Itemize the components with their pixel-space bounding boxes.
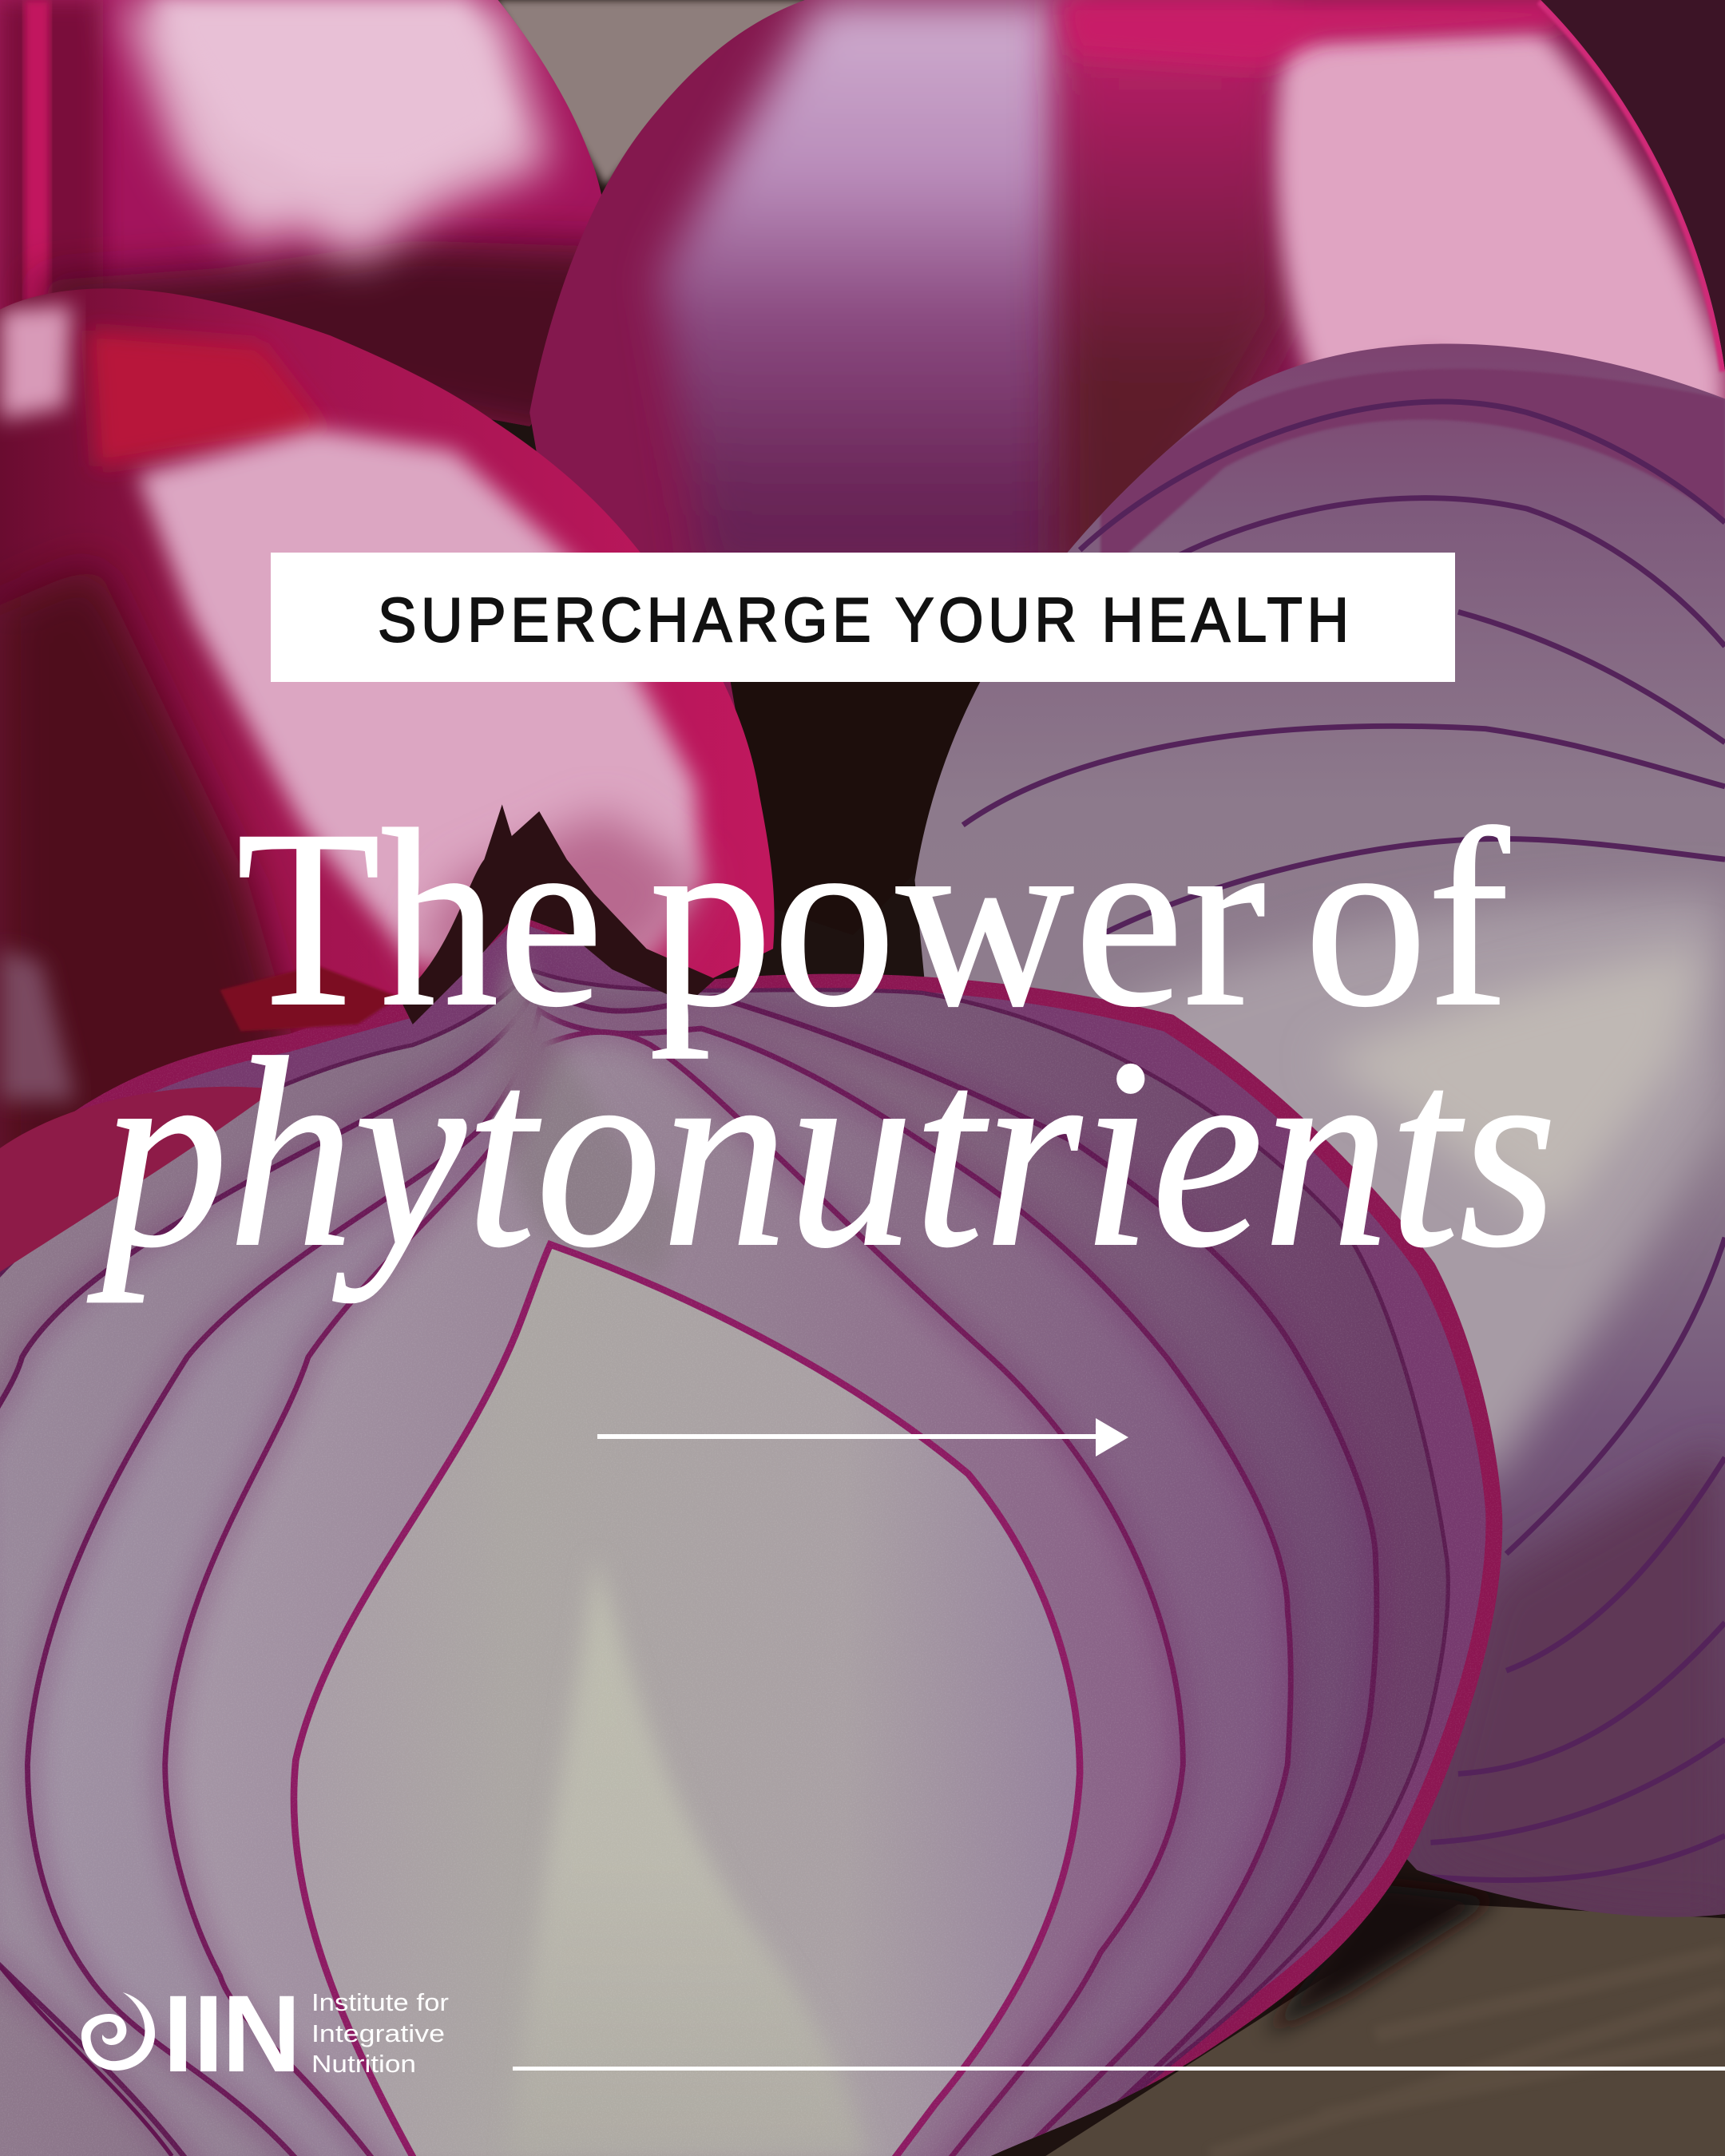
title line two: phytonutrients [86,1002,1557,1303]
banner text: SUPERCHARGE YOUR HEALTH [378,585,1349,655]
logo letters [163,1973,301,2095]
middle dark gap [729,674,990,935]
stem top [399,804,716,1024]
ring c [27,1011,1291,2156]
top left onion [0,0,601,426]
ring shading [0,983,1377,2156]
logo wordmark: Integrative [311,2019,445,2047]
left onion [0,288,775,1148]
title line one: The [236,778,603,1059]
logo wordmark [311,1988,449,2078]
speckle texture [0,880,1513,2156]
logo letters: N [222,1973,301,2095]
peeled skin flap [0,1087,275,1272]
logo letters: I [163,1973,193,2095]
arrow [597,1418,1128,1456]
logo spiral icon [81,1992,155,2071]
headline banner [271,553,1455,682]
logo [81,1973,449,2095]
title [86,778,1557,1303]
title line one: of [1304,778,1512,1059]
right halved onion [894,316,1725,1939]
title line one: power [649,778,1266,1060]
ring d [165,1032,1183,2156]
logo wordmark: Nutrition [311,2050,416,2078]
inner rim band [0,921,1485,2156]
logo letters: I [193,1973,224,2095]
inner ring lines [1080,402,1725,550]
main halved onion [0,804,1513,2156]
core [294,1244,1080,2156]
logo wordmark: Institute for [311,1988,449,2016]
ring a [0,969,1448,2156]
stem wedge [497,949,688,1278]
footer rule [513,2067,1725,2071]
top right onion [529,0,1725,709]
white bud [512,1556,866,2156]
title line one [236,778,1512,1060]
ring b [0,983,1377,2156]
outer rim line [0,1966,172,2156]
